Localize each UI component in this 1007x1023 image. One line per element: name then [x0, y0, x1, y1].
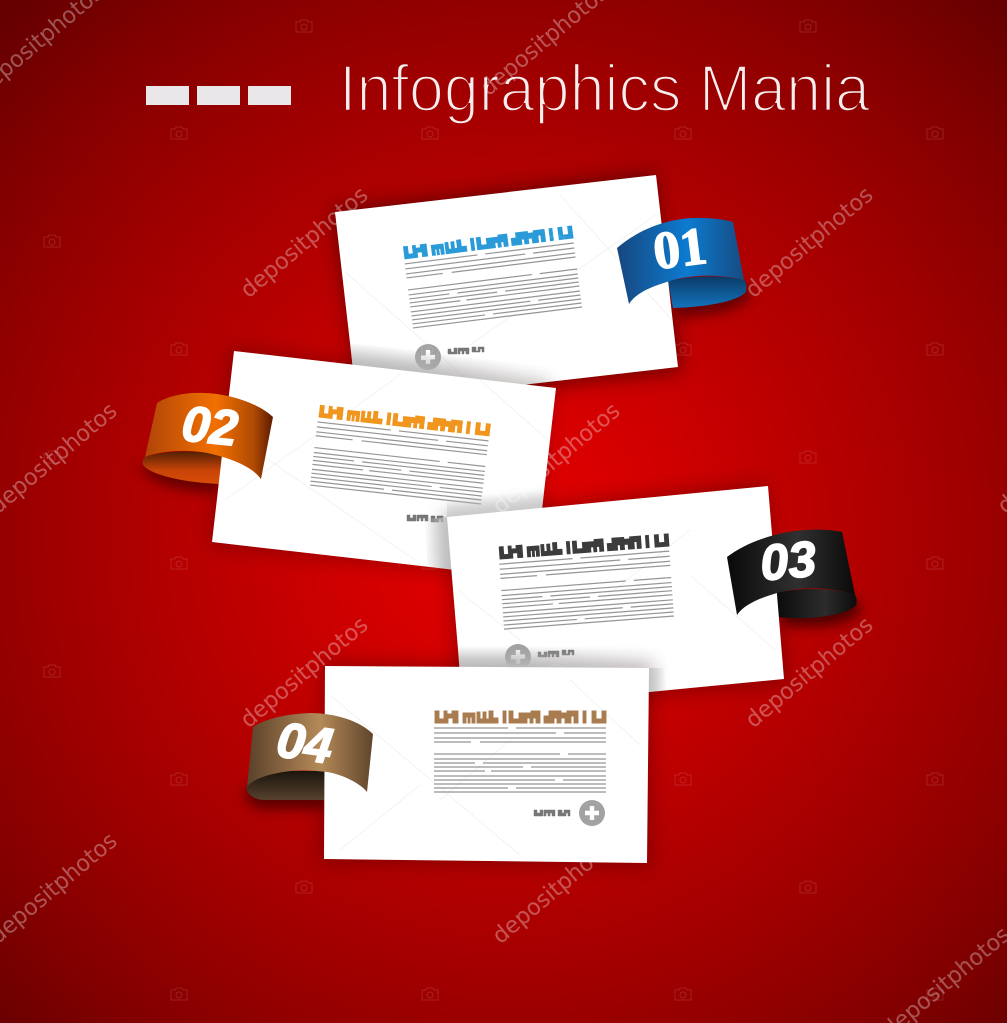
- card sheet: 03: [447, 486, 784, 710]
- ribbon back: 02: [143, 451, 222, 484]
- header bars icon: [146, 86, 291, 105]
- ribbon back: 01: [668, 276, 746, 308]
- small link placeholder: 04: [534, 810, 570, 816]
- heading placeholder: 02: [310, 405, 490, 504]
- watermark text: depositphotos: [488, 828, 625, 949]
- panel: card 02: [138, 342, 559, 580]
- ribbon front: 01: [617, 218, 744, 304]
- number: 03: 03: [758, 531, 818, 591]
- heading placeholder: 03: [498, 534, 674, 629]
- heading placeholder: 01: [402, 226, 582, 328]
- number: 04: 04: [273, 711, 336, 775]
- panel: card 01: [332, 172, 750, 408]
- plus button: 04: [579, 800, 605, 826]
- ribbon back: 03: [776, 589, 857, 618]
- card sheet: 04: [324, 666, 649, 863]
- watermark text: depositphotos: [741, 612, 878, 733]
- watermark text: depositphotos: [741, 182, 878, 303]
- watermark text: depositphotos: [236, 182, 373, 303]
- watermark text: depositphotos: [236, 612, 373, 733]
- ribbon back: 04: [247, 771, 328, 800]
- heading placeholder: 04: [434, 711, 606, 792]
- ribbon front: 03: [727, 530, 855, 615]
- small link placeholder: 02: [407, 515, 443, 522]
- panel: card 03: [424, 482, 860, 714]
- ribbon front: 04: [247, 713, 373, 792]
- watermark text: depositphotos: [488, 398, 625, 519]
- card sheet: 02: [212, 351, 556, 579]
- title: Infographics Mania: [339, 51, 870, 125]
- card sheet: 01: [335, 175, 678, 404]
- shadow on card 02: [427, 492, 544, 570]
- panel: card 04: [244, 646, 668, 867]
- number: 01: 01: [650, 217, 710, 281]
- small link placeholder: 01: [448, 347, 484, 354]
- plus button: 01: [415, 344, 441, 370]
- small link placeholder: 03: [538, 650, 574, 657]
- ribbon front: 02: [145, 393, 273, 479]
- shadow on card 01: [350, 344, 522, 383]
- number: 02: 02: [179, 395, 241, 457]
- shadow on card 03: [458, 648, 664, 692]
- plus button: 03: [505, 644, 531, 670]
